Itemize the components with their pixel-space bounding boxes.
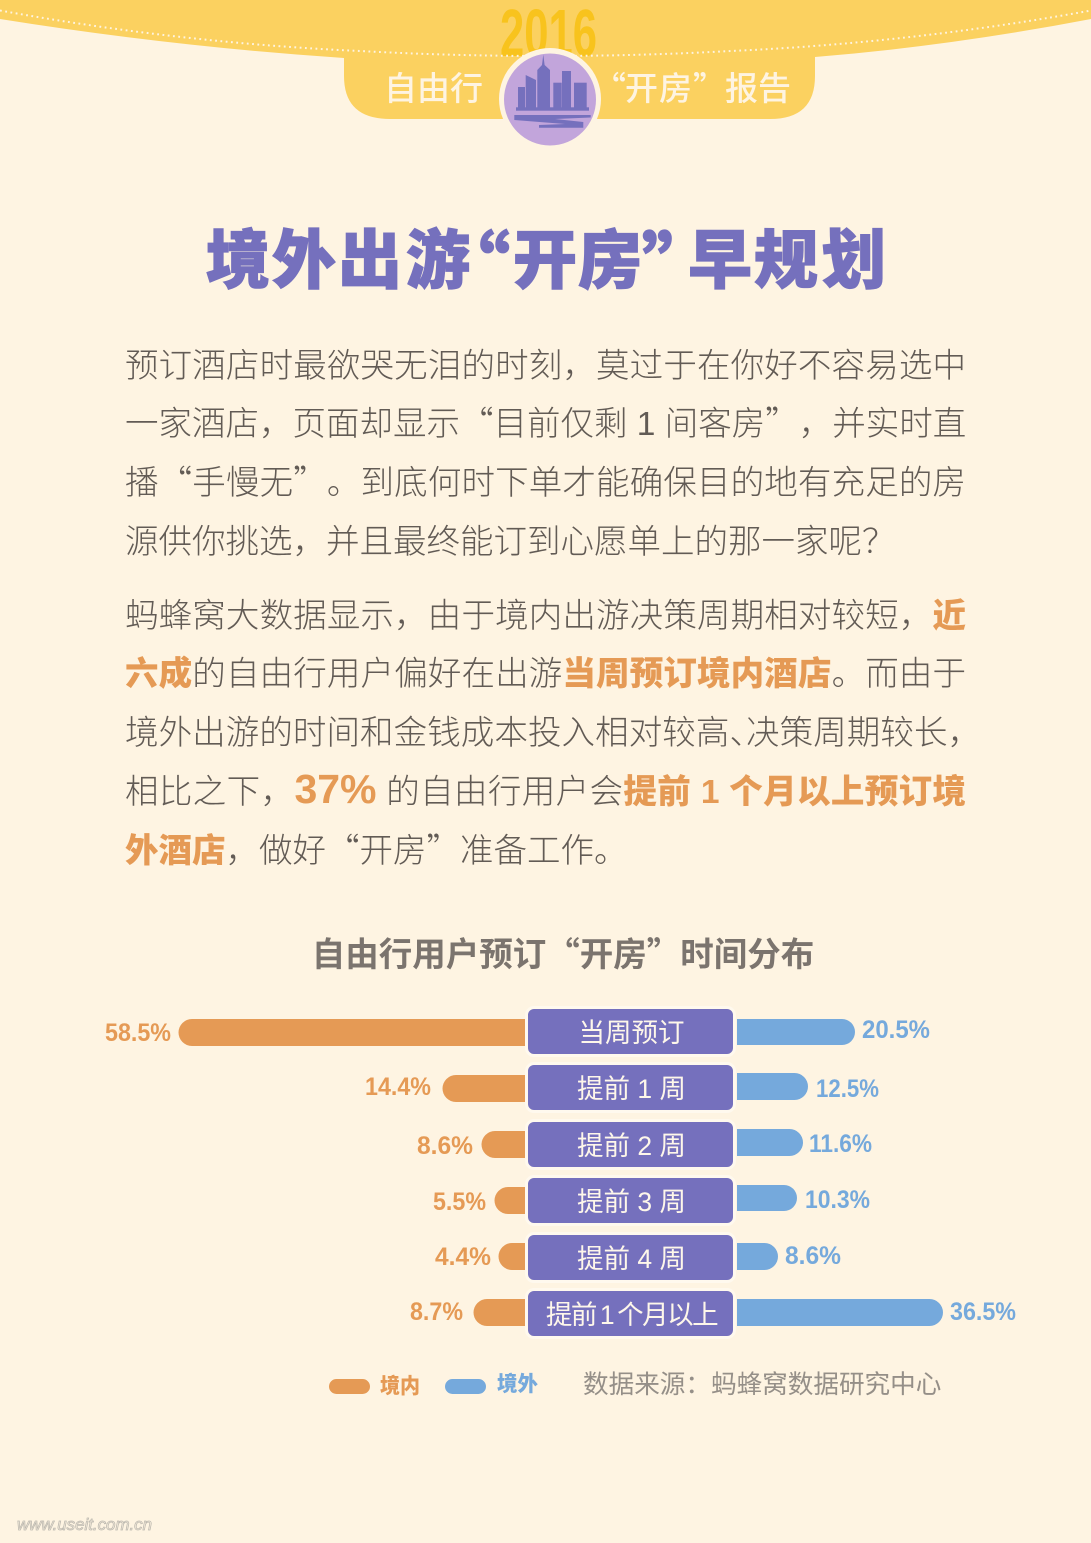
category label: 1 week: 提前 1 周 — [577, 1074, 686, 1104]
category label: 1 week — [525, 1062, 736, 1113]
paragraph 2: 相比之下，37% 的自由行用户会提前 1 个月以上预订境 — [125, 766, 966, 812]
category label: over 1 month: 提前1个月以上 — [546, 1300, 717, 1330]
domestic bars — [178, 1019, 526, 1326]
legend: overseas — [445, 1372, 538, 1396]
overseas values — [785, 1016, 1016, 1326]
paragraph 2: 六成的自由行用户偏好在出游当周预订境内酒店。而由于 — [125, 656, 966, 693]
main title — [206, 210, 886, 300]
overseas values: 12.5% — [816, 1075, 879, 1103]
data source: 数据来源：蚂蜂窝数据研究中心 — [583, 1371, 941, 1399]
domestic values: 58.5% — [105, 1019, 171, 1047]
category label: over 1 month — [525, 1288, 736, 1339]
paragraph 1: 预订酒店时最欲哭无泪的时刻，莫过于在你好不容易选中 — [125, 348, 966, 385]
legend — [329, 1372, 538, 1398]
overseas values: 10.3% — [805, 1186, 870, 1214]
legend: domestic — [329, 1374, 420, 1398]
legend: overseas: 境外 — [497, 1372, 538, 1396]
main title: 外 — [272, 210, 336, 300]
domestic values: 5.5% — [433, 1188, 486, 1216]
main title: 开 — [513, 210, 577, 300]
paragraph 1 — [125, 348, 966, 561]
category label: 3 weeks: 提前 3 周 — [577, 1187, 686, 1217]
header banner — [0, 0, 1091, 146]
dotted line — [0, 10, 1091, 56]
domestic values: 8.6% — [417, 1132, 473, 1160]
main title: 出 — [338, 210, 402, 300]
domestic values: 8.7% — [410, 1298, 463, 1326]
yellow banner band — [0, 0, 1091, 119]
overseas values: 11.6% — [809, 1130, 872, 1158]
main title: 划 — [822, 210, 886, 300]
paragraph 2: 蚂蜂窝大数据显示，由于境内出游决策周期相对较短，近 — [125, 598, 966, 635]
main title: 游 — [406, 210, 470, 300]
overseas values: 20.5% — [862, 1016, 930, 1044]
category label: this week — [525, 1006, 736, 1057]
header text left: 自由行 — [384, 62, 483, 110]
category label: 2 weeks — [525, 1119, 736, 1170]
category label: this week: 当周预订 — [578, 1018, 684, 1048]
category label: 3 weeks — [525, 1175, 736, 1226]
paragraph 1: 源供你挑选，并且最终能订到心愿单上的那一家呢？ — [125, 524, 896, 561]
main title: 房 — [578, 210, 642, 300]
paragraph 2: 外酒店，做好“开房”准备工作。 — [125, 823, 628, 872]
overseas bars — [737, 1019, 943, 1326]
category label: 4 weeks: 提前 4 周 — [577, 1244, 686, 1274]
overseas values: 8.6% — [785, 1242, 841, 1270]
chart title: 自由行用户预订“开房”时间分布 — [312, 927, 814, 976]
header text right: “开房”报告 — [593, 62, 791, 110]
main title: 规 — [754, 210, 818, 300]
watermark: www.useit.com.cn — [17, 1515, 152, 1534]
paragraph 1: 一家酒店，页面却显示“目前仅剩 1 间客房”，并实时直 — [125, 396, 966, 445]
category label: 4 weeks — [525, 1232, 736, 1283]
paragraph 2: 境外出游的时间和金钱成本投入相对较高、决策周期较长， — [125, 715, 966, 752]
paragraph 2 — [125, 598, 966, 872]
domestic values: 4.4% — [435, 1243, 491, 1271]
main title: 早 — [688, 210, 752, 300]
icon: city skyline badge — [499, 48, 601, 150]
domestic values: 14.4% — [365, 1073, 431, 1101]
legend: domestic: 境内 — [380, 1374, 420, 1398]
paragraph 1: 播“手慢无”。到底何时下单才能确保目的地有充足的房 — [125, 455, 966, 504]
domestic values — [105, 1019, 491, 1326]
bar chart — [105, 1006, 1016, 1339]
overseas values: 36.5% — [950, 1298, 1016, 1326]
category label: 2 weeks: 提前 2 周 — [577, 1131, 686, 1161]
main title: 境 — [206, 210, 270, 300]
